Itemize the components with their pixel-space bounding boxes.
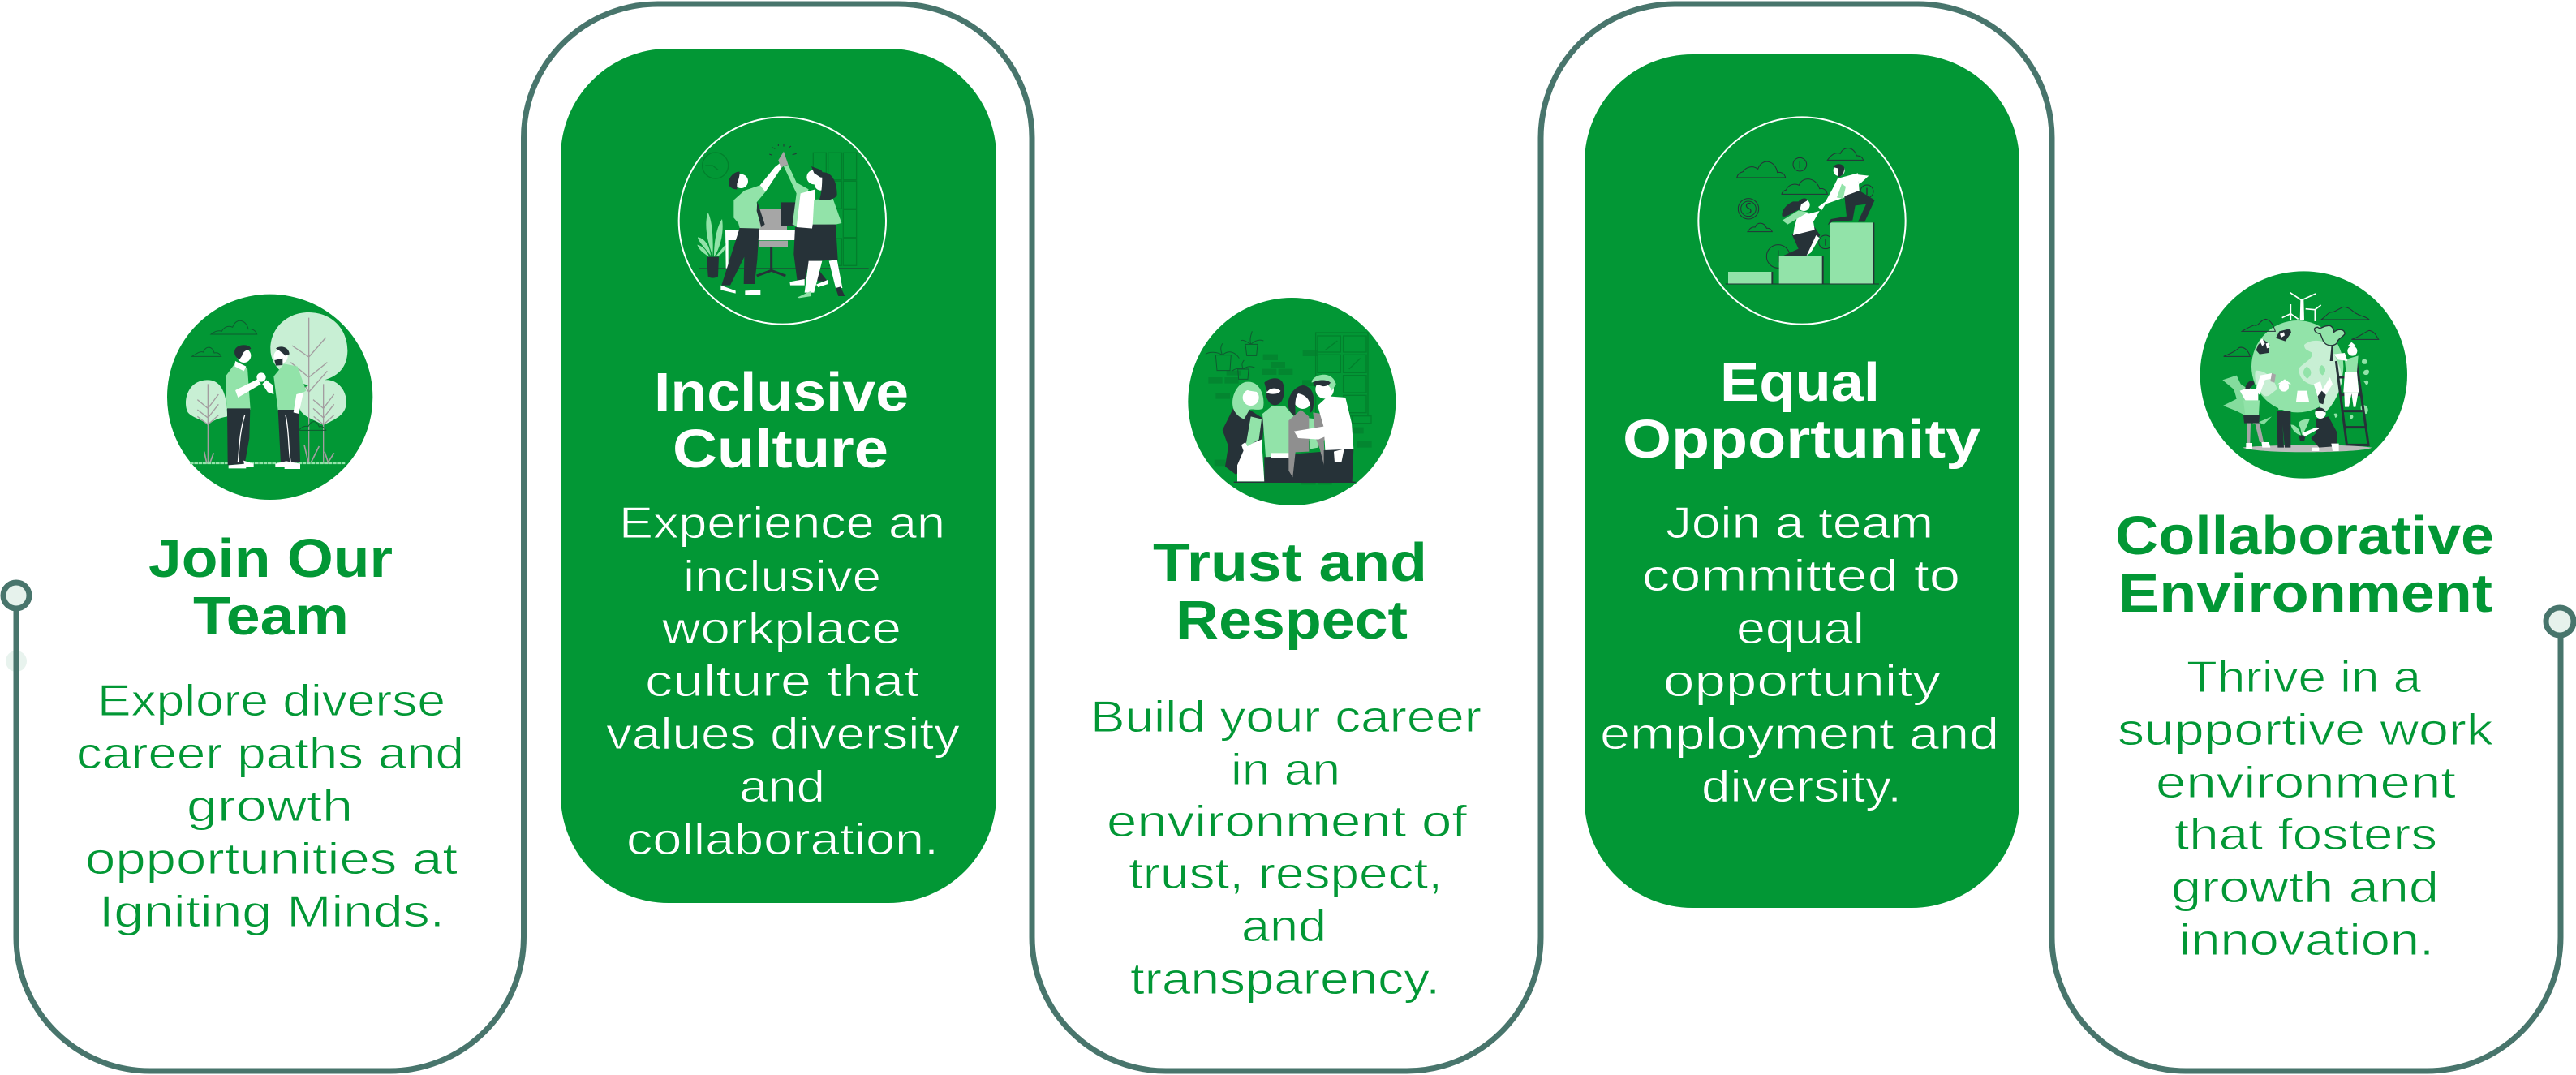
heading	[2115, 505, 2494, 624]
body text: Igniting Minds.	[99, 887, 445, 936]
body text	[606, 498, 961, 864]
body text: opportunity	[1663, 656, 1942, 706]
icon: people tending a green globe	[2200, 271, 2407, 479]
body text	[2118, 652, 2494, 965]
body text: committed to	[1642, 551, 1960, 600]
body text	[1600, 498, 1999, 811]
heading: Inclusive	[654, 362, 909, 423]
body text: opportunities at	[85, 834, 458, 884]
body text: and	[1241, 901, 1327, 951]
panel: Trust and Respect	[1090, 298, 1482, 1004]
body text: diversity.	[1701, 762, 1902, 811]
heading	[654, 362, 909, 479]
icon: colleagues high-fiving in office	[679, 117, 886, 325]
body text: culture that	[645, 656, 919, 706]
panel: Join Our Team	[76, 295, 464, 936]
body text: and	[739, 762, 825, 811]
body text: Join a team	[1666, 498, 1933, 548]
body text: values diversity	[606, 709, 961, 759]
panel: Equal Opportunity	[1585, 54, 2019, 908]
body text: employment and	[1600, 709, 1999, 759]
heading: Join Our	[148, 528, 393, 589]
body text: collaboration.	[626, 815, 939, 864]
body text: environment of	[1107, 797, 1468, 846]
body text: growth	[187, 781, 353, 831]
heading: Trust and	[1153, 532, 1427, 593]
body text	[1090, 692, 1482, 1004]
icon: group of four friends	[1188, 298, 1396, 505]
end dot	[2546, 608, 2574, 635]
body text: inclusive	[683, 552, 881, 601]
body text: workplace	[661, 604, 901, 653]
heading	[1153, 532, 1427, 651]
heading: Environment	[2118, 563, 2492, 624]
body text: supportive work	[2118, 705, 2494, 755]
body text: Thrive in a	[2187, 652, 2422, 702]
panel: Inclusive Culture	[561, 49, 996, 903]
panel: Collaborative Environment	[2115, 271, 2494, 965]
body text: in an	[1231, 745, 1340, 794]
green card background	[561, 49, 996, 903]
start dot	[3, 583, 29, 608]
heading: Respect	[1176, 590, 1408, 651]
body text: transparency.	[1130, 954, 1440, 1004]
body text: growth and	[2171, 862, 2439, 912]
body text: environment	[2156, 758, 2456, 807]
green card background	[1585, 54, 2019, 908]
heading: Opportunity	[1623, 409, 1980, 470]
body text: career paths and	[76, 729, 464, 778]
icon: two men shaking hands among trees	[167, 295, 372, 500]
body text: innovation.	[2179, 915, 2434, 965]
body text: equal	[1736, 604, 1864, 653]
heading: Culture	[673, 419, 888, 479]
body text: Explore diverse	[97, 676, 445, 725]
body text	[76, 676, 464, 936]
heading	[1623, 352, 1980, 470]
heading: Equal	[1720, 352, 1880, 413]
body text: trust, respect,	[1129, 849, 1443, 898]
icon: man helping woman up bar steps	[1698, 117, 1906, 325]
heading: Team	[193, 586, 349, 647]
body text: Experience an	[619, 498, 945, 548]
body text: that fosters	[2174, 810, 2437, 859]
body text: Build your career	[1090, 692, 1482, 742]
heading	[148, 528, 393, 647]
faint marker	[6, 651, 27, 672]
heading: Collaborative	[2115, 505, 2494, 566]
